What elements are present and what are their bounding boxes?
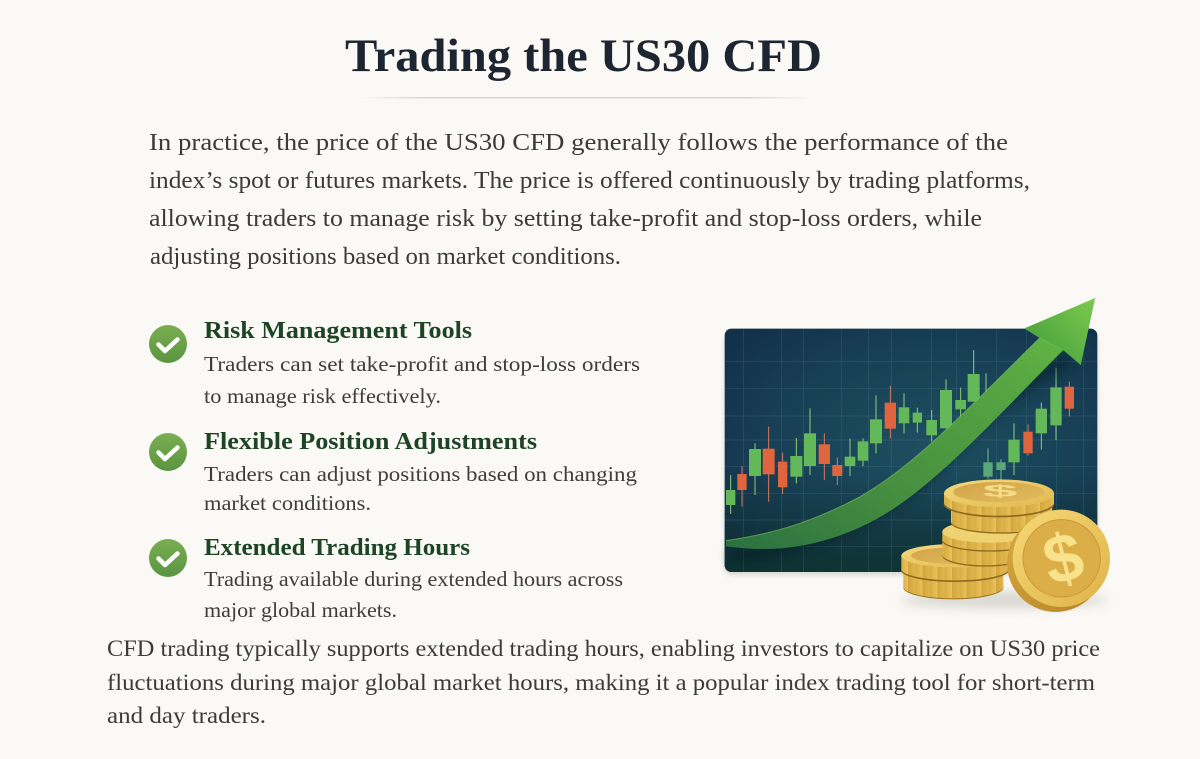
intro paragraph bbox=[149, 130, 1030, 270]
large front coin: $ bbox=[1036, 517, 1091, 600]
benefit: extended trading hours bbox=[149, 535, 623, 622]
description: risk management tools: Traders can set take-profit and stop-loss orders bbox=[204, 352, 640, 376]
candlesticks bbox=[726, 350, 1074, 514]
closing paragraph: fluctuations during major global market hours, making it a popular index trading tool for short-term bbox=[107, 670, 1095, 695]
icon: check badge bbox=[149, 325, 187, 363]
illustration: rising chart with coins bbox=[725, 298, 1110, 612]
icon: check badge bbox=[149, 433, 187, 471]
heading: risk management tools: Risk Management Tools bbox=[204, 318, 472, 344]
growth arrow bbox=[726, 298, 1095, 557]
coin shadow bbox=[900, 592, 1107, 608]
description: extended trading hours bbox=[204, 567, 623, 622]
benefit: risk management tools bbox=[149, 318, 640, 408]
heading: flexible position adjustments: Flexible Position Adjustments bbox=[204, 429, 537, 455]
closing paragraph: CFD trading typically supports extended trading hours, enabling investors to capitalize on US30 price bbox=[107, 636, 1100, 661]
description: risk management tools bbox=[204, 352, 640, 408]
description: flexible position adjustments: market conditions. bbox=[204, 491, 371, 515]
large front coin bbox=[1007, 510, 1110, 612]
heading: extended trading hours: Extended Trading Hours bbox=[204, 535, 470, 561]
closing paragraph bbox=[107, 636, 1100, 728]
gold coin stacks bbox=[901, 479, 1054, 599]
description: flexible position adjustments bbox=[204, 462, 638, 515]
description: extended trading hours: major global markets. bbox=[204, 598, 397, 622]
gold coin stacks: $ bbox=[982, 482, 1018, 500]
intro paragraph: allowing traders to manage risk by setting take-profit and stop-loss orders, while bbox=[149, 206, 982, 232]
icon: check badge bbox=[149, 539, 187, 577]
description: extended trading hours: Trading available during extended hours across bbox=[204, 567, 623, 591]
closing paragraph: and day traders. bbox=[107, 703, 266, 728]
description: risk management tools: to manage risk effectively. bbox=[204, 384, 441, 408]
description: flexible position adjustments: Traders can adjust positions based on changing bbox=[204, 462, 638, 486]
chart card bbox=[725, 329, 1097, 575]
intro paragraph: adjusting positions based on market conditions. bbox=[150, 244, 621, 270]
title: Trading the US30 CFD bbox=[345, 30, 822, 82]
intro paragraph: In practice, the price of the US30 CFD generally follows the performance of the bbox=[149, 130, 1008, 156]
intro paragraph: index’s spot or futures markets. The price is offered continuously by trading platforms, bbox=[149, 168, 1030, 194]
benefit: flexible position adjustments bbox=[149, 429, 638, 515]
